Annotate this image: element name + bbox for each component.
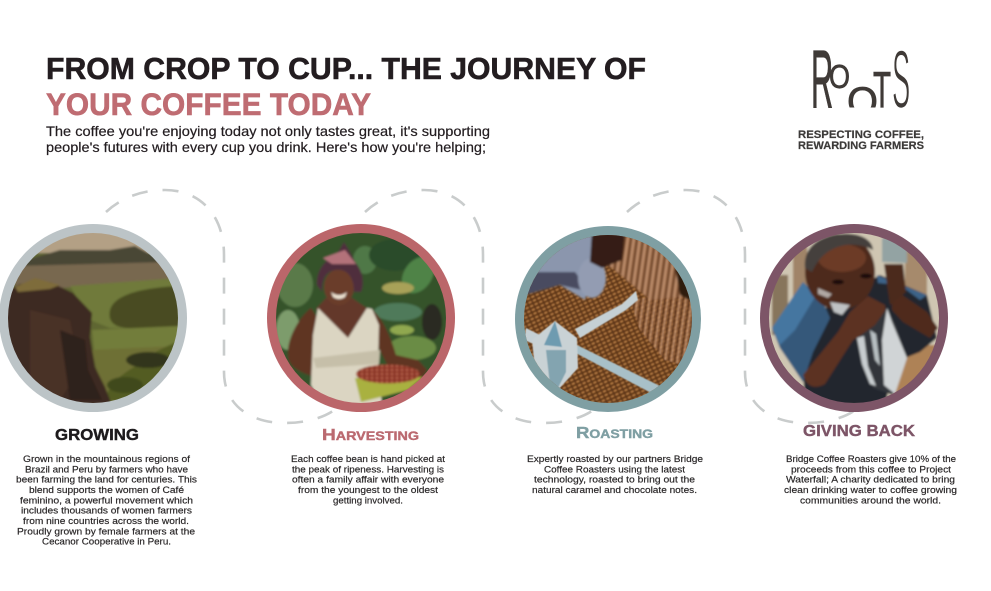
panel: giving back photo — [760, 224, 948, 412]
title line 2: YOUR COFFEE TODAY — [46, 86, 371, 122]
panel: harvesting photo — [267, 224, 455, 412]
text block: roasting — [527, 453, 703, 495]
text block: growing: from nine countries across the world. — [23, 515, 189, 526]
text block: giving back: communities around the world. — [800, 494, 941, 505]
text block: growing — [16, 453, 197, 547]
logo: Roots: T — [873, 61, 891, 119]
arrow: roasting to giving back — [627, 190, 858, 423]
logo: Roots: S — [892, 34, 910, 126]
arrow: growing to harvesting — [106, 190, 337, 423]
text block: harvesting — [291, 453, 445, 505]
text block: roasting: Expertly roasted by our partners Bridge — [527, 453, 703, 464]
text block: giving back: proceeds from this coffee to Project — [791, 463, 951, 474]
text block: roasting: Coffee Roasters using the latest — [544, 463, 685, 474]
panel: growing photo — [0, 224, 190, 412]
text block: roasting: natural caramel and chocolate notes. — [532, 484, 697, 495]
logo: Roots: O — [829, 58, 850, 95]
heading: harvesting: HARVESTING — [322, 427, 419, 444]
text block: growing: Grown in the mountainous regions of — [23, 453, 190, 464]
roaster paddles — [575, 291, 638, 338]
text block: giving back: Waterfall; A charity dedicated to bring — [786, 474, 955, 485]
heading: giving back: GIVING BACK — [803, 423, 915, 440]
text block: harvesting: getting involved. — [333, 494, 403, 505]
title line 1: FROM CROP TO CUP... THE JOURNEY OF — [46, 51, 646, 86]
text block: roasting: technology, roasted to bring out the — [534, 474, 695, 485]
text block: growing: Brazil and Peru by farmers who have — [25, 463, 188, 474]
logo: Roots: O — [847, 80, 878, 124]
intro text: The coffee you're enjoying today not only tastes great, it's supporting — [46, 124, 490, 139]
logo tagline: REWARDING FARMERS — [798, 140, 924, 152]
logo tagline — [798, 129, 924, 152]
text block: growing: Cecanor Cooperative in Peru. — [42, 536, 171, 547]
panel: roasting photo — [515, 226, 701, 412]
text block: harvesting: from the youngest to the oldest — [298, 484, 438, 495]
text block: growing: feminino, a powerful movement which — [20, 494, 193, 505]
heading: growing: GROWING — [55, 427, 139, 444]
logo: Roots: R — [811, 33, 833, 126]
text block: giving back: Bridge Coffee Roasters give 10% of the — [786, 453, 956, 464]
logo: Roots — [813, 50, 909, 108]
text block: growing: Proudly grown by female farmers at the — [17, 525, 195, 536]
text block: harvesting: the peak of ripeness. Harvesting is — [292, 463, 444, 474]
text block: harvesting: often a family affair with everyone — [292, 474, 444, 485]
text block: giving back — [784, 453, 957, 505]
text block: giving back: clean drinking water to coffee growing — [784, 484, 957, 495]
text block: growing: blend supports the women of Café — [29, 484, 184, 495]
title — [46, 51, 646, 122]
intro text: people's futures with every cup you drink. Here's how you're helping; — [46, 140, 486, 155]
text block: growing: been farming the land for centuries. This — [16, 474, 197, 485]
heading: roasting: ROASTING — [576, 425, 653, 442]
arrow: harvesting to roasting — [365, 190, 596, 423]
logo tagline: RESPECTING COFFEE, — [798, 129, 924, 141]
text block: growing: includes thousands of women farmers — [21, 505, 192, 516]
text block: harvesting: Each coffee bean is hand picked at — [291, 453, 445, 464]
intro text — [46, 124, 490, 155]
